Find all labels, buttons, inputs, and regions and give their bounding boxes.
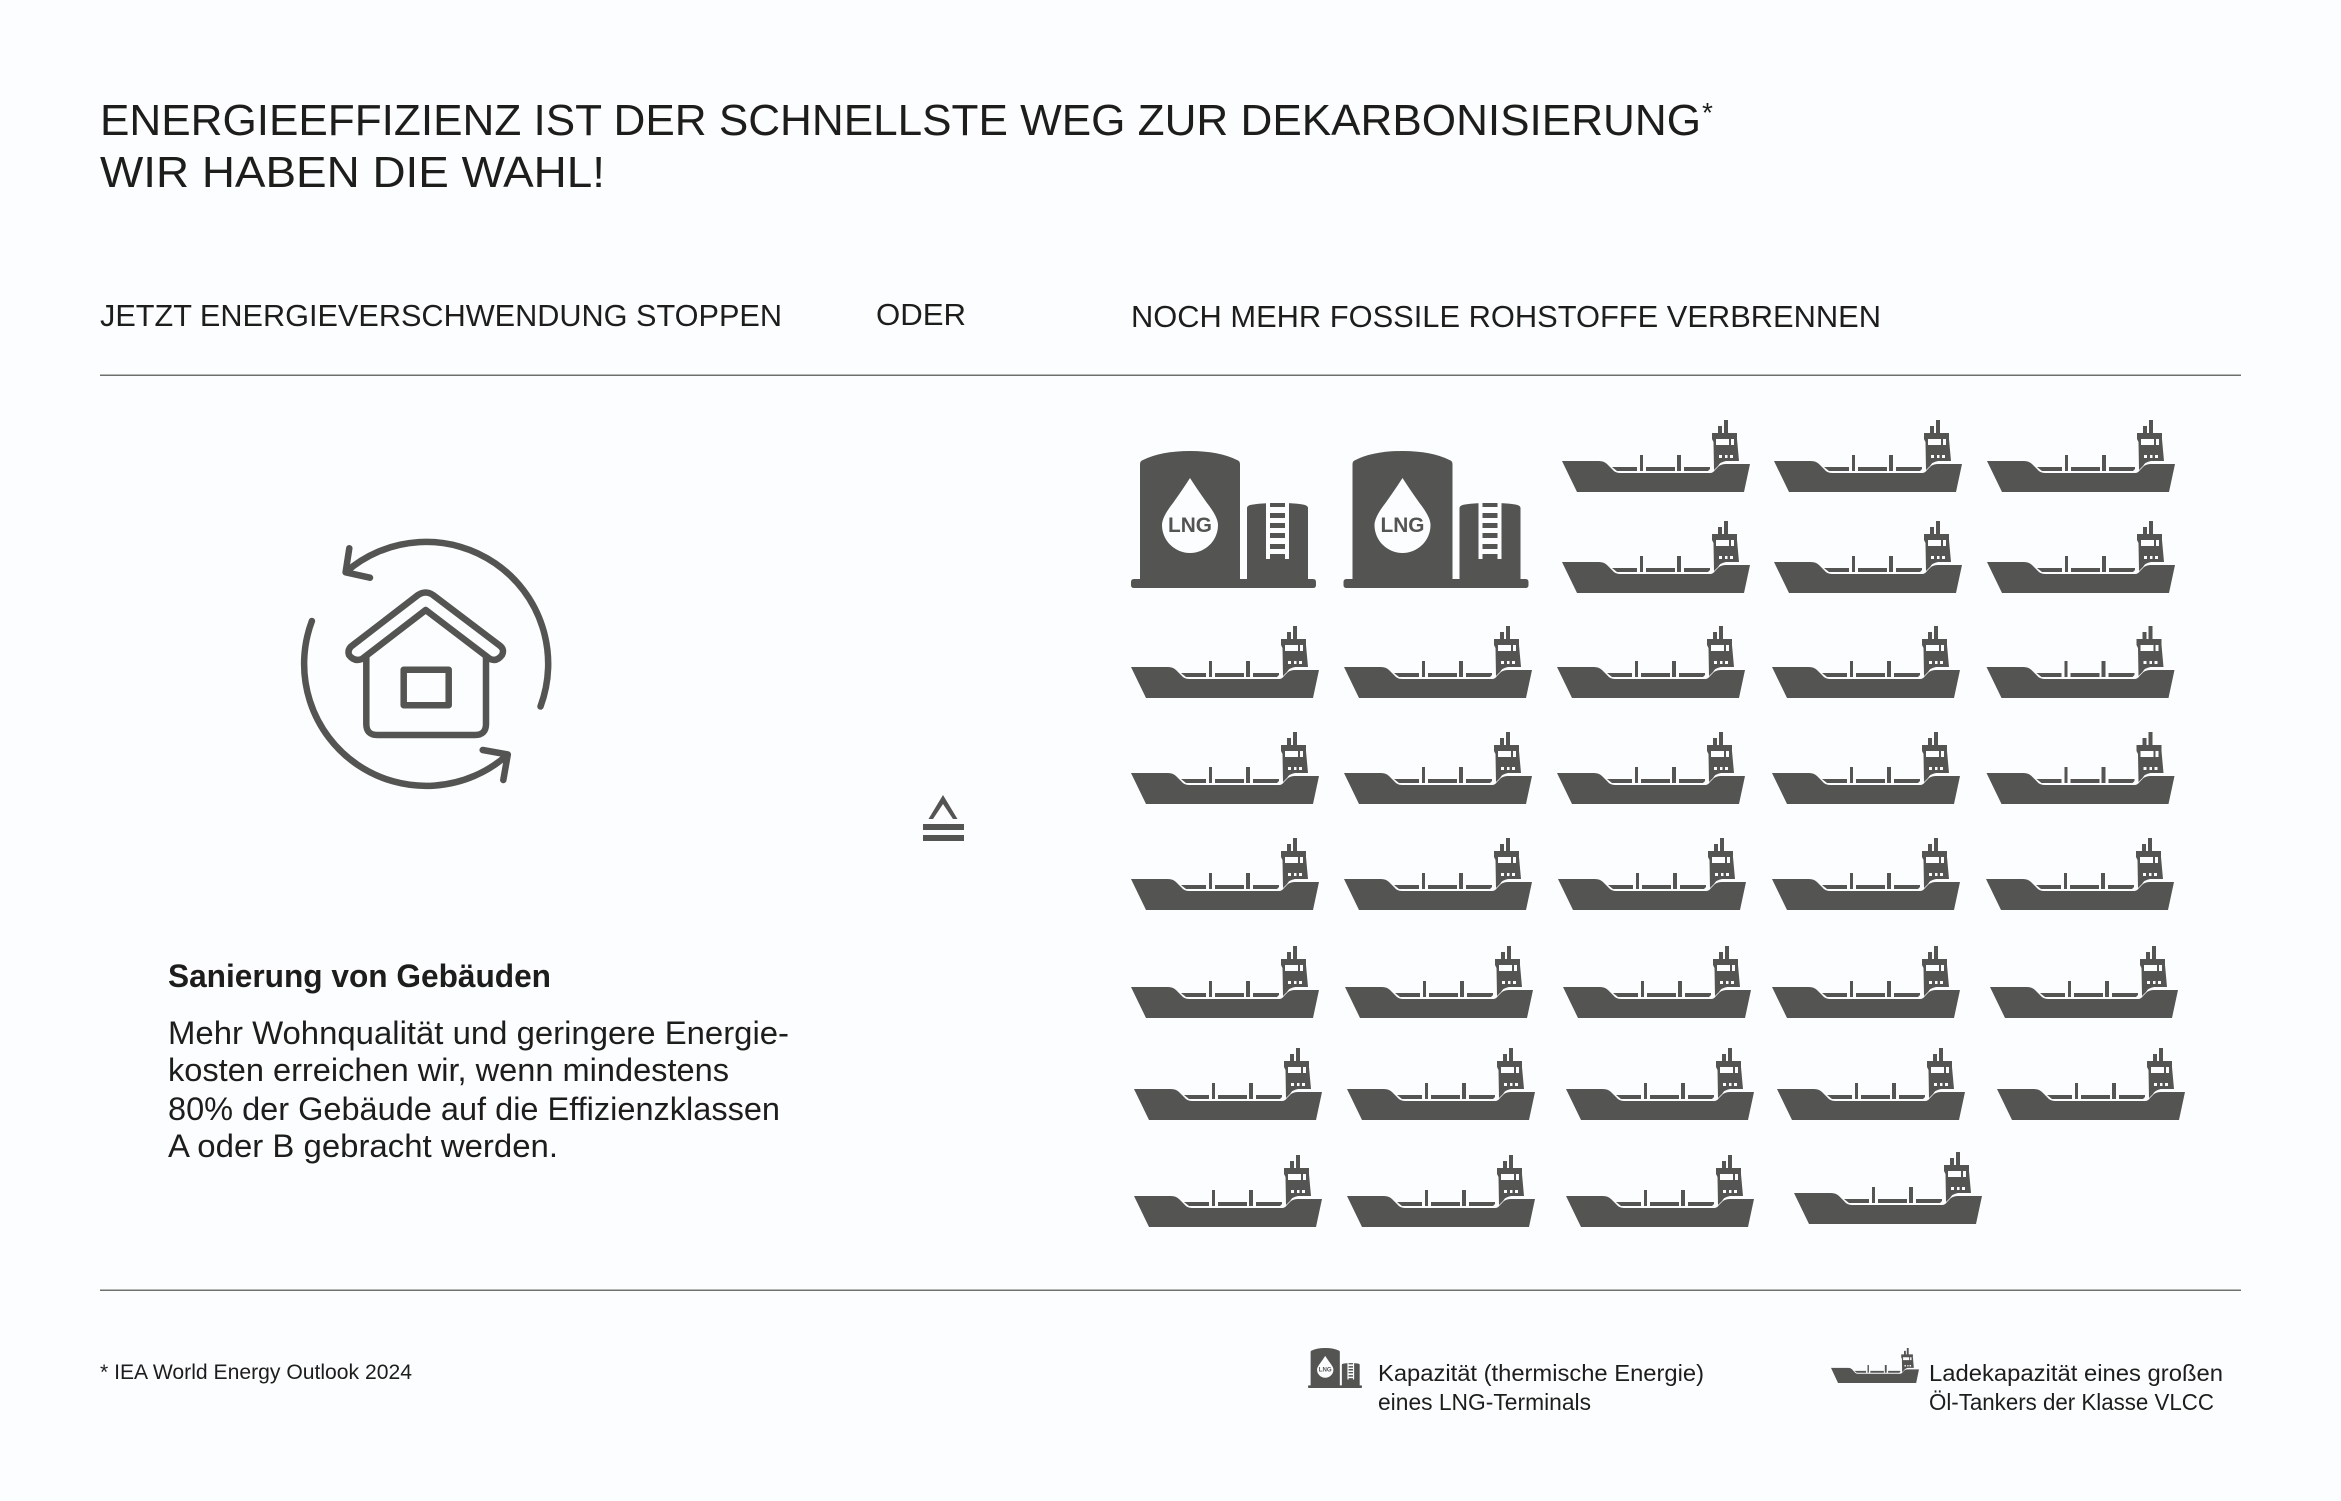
icons: tanker row 6	[1131, 946, 2178, 1018]
text block: building renovation: 80% der Gebäude auf die Effizienzklassen	[168, 1091, 780, 1127]
title: ENERGIEEFFIZIENZ IST DER SCHNELLSTE WEG ZUR DEKARBONISIERUNG	[100, 96, 1701, 145]
heading: stop energy waste: JETZT ENERGIEVERSCHWENDUNG STOPPEN	[100, 298, 782, 333]
icons: tanker row 8	[1134, 1152, 1982, 1227]
legend: LNG terminal	[1308, 1348, 1704, 1415]
icon: house with circular arrows	[304, 542, 548, 786]
text block: building renovation	[168, 958, 789, 1164]
icon: LNG terminal 1	[1131, 451, 1316, 588]
icon: LNG terminal 2: LNG	[1380, 514, 1424, 537]
pictogram grid: LNG terminals and oil tankers	[1131, 420, 2185, 1227]
text block: building renovation: kosten erreichen wir, wenn mindestens	[168, 1052, 729, 1088]
text block: building renovation: Sanierung von Gebäuden	[168, 958, 551, 994]
icons: tanker row 1	[1562, 420, 2175, 492]
heading: or: ODER	[876, 297, 966, 332]
icon: corresponds to symbol	[923, 795, 964, 841]
icons: tanker row 4	[1131, 732, 2174, 804]
icon: legend LNG terminal	[1308, 1348, 1362, 1388]
legend: VLCC tanker: Ladekapazität eines großen	[1929, 1360, 2223, 1386]
title: *	[1702, 97, 1713, 128]
icons: tanker row 7	[1134, 1048, 2185, 1120]
icon: legend LNG terminal: LNG	[1319, 1367, 1332, 1374]
title	[100, 96, 1713, 197]
title: WIR HABEN DIE WAHL!	[100, 148, 605, 197]
icons: tanker row 5	[1131, 838, 2174, 910]
text block: building renovation: A oder B gebracht werden.	[168, 1128, 558, 1164]
legend: LNG terminal: Kapazität (thermische Energie)	[1378, 1360, 1704, 1386]
icon: LNG terminal 1: LNG	[1168, 514, 1212, 537]
icons: tanker row 2	[1562, 521, 2175, 593]
legend: VLCC tanker: Öl-Tankers der Klasse VLCC	[1929, 1389, 2214, 1415]
legend: LNG terminal: eines LNG-Terminals	[1378, 1389, 1591, 1415]
icon: legend tanker	[1831, 1348, 1919, 1383]
icon: LNG terminal 2	[1344, 451, 1528, 588]
icons: tanker row 3	[1131, 626, 2174, 698]
legend: VLCC tanker	[1831, 1348, 2223, 1415]
text block: building renovation: Mehr Wohnqualität und geringere Energie-	[168, 1015, 789, 1051]
heading: burn more fossil fuels: NOCH MEHR FOSSILE ROHSTOFFE VERBRENNEN	[1131, 299, 1881, 334]
footnote: * IEA World Energy Outlook 2024	[100, 1361, 412, 1384]
